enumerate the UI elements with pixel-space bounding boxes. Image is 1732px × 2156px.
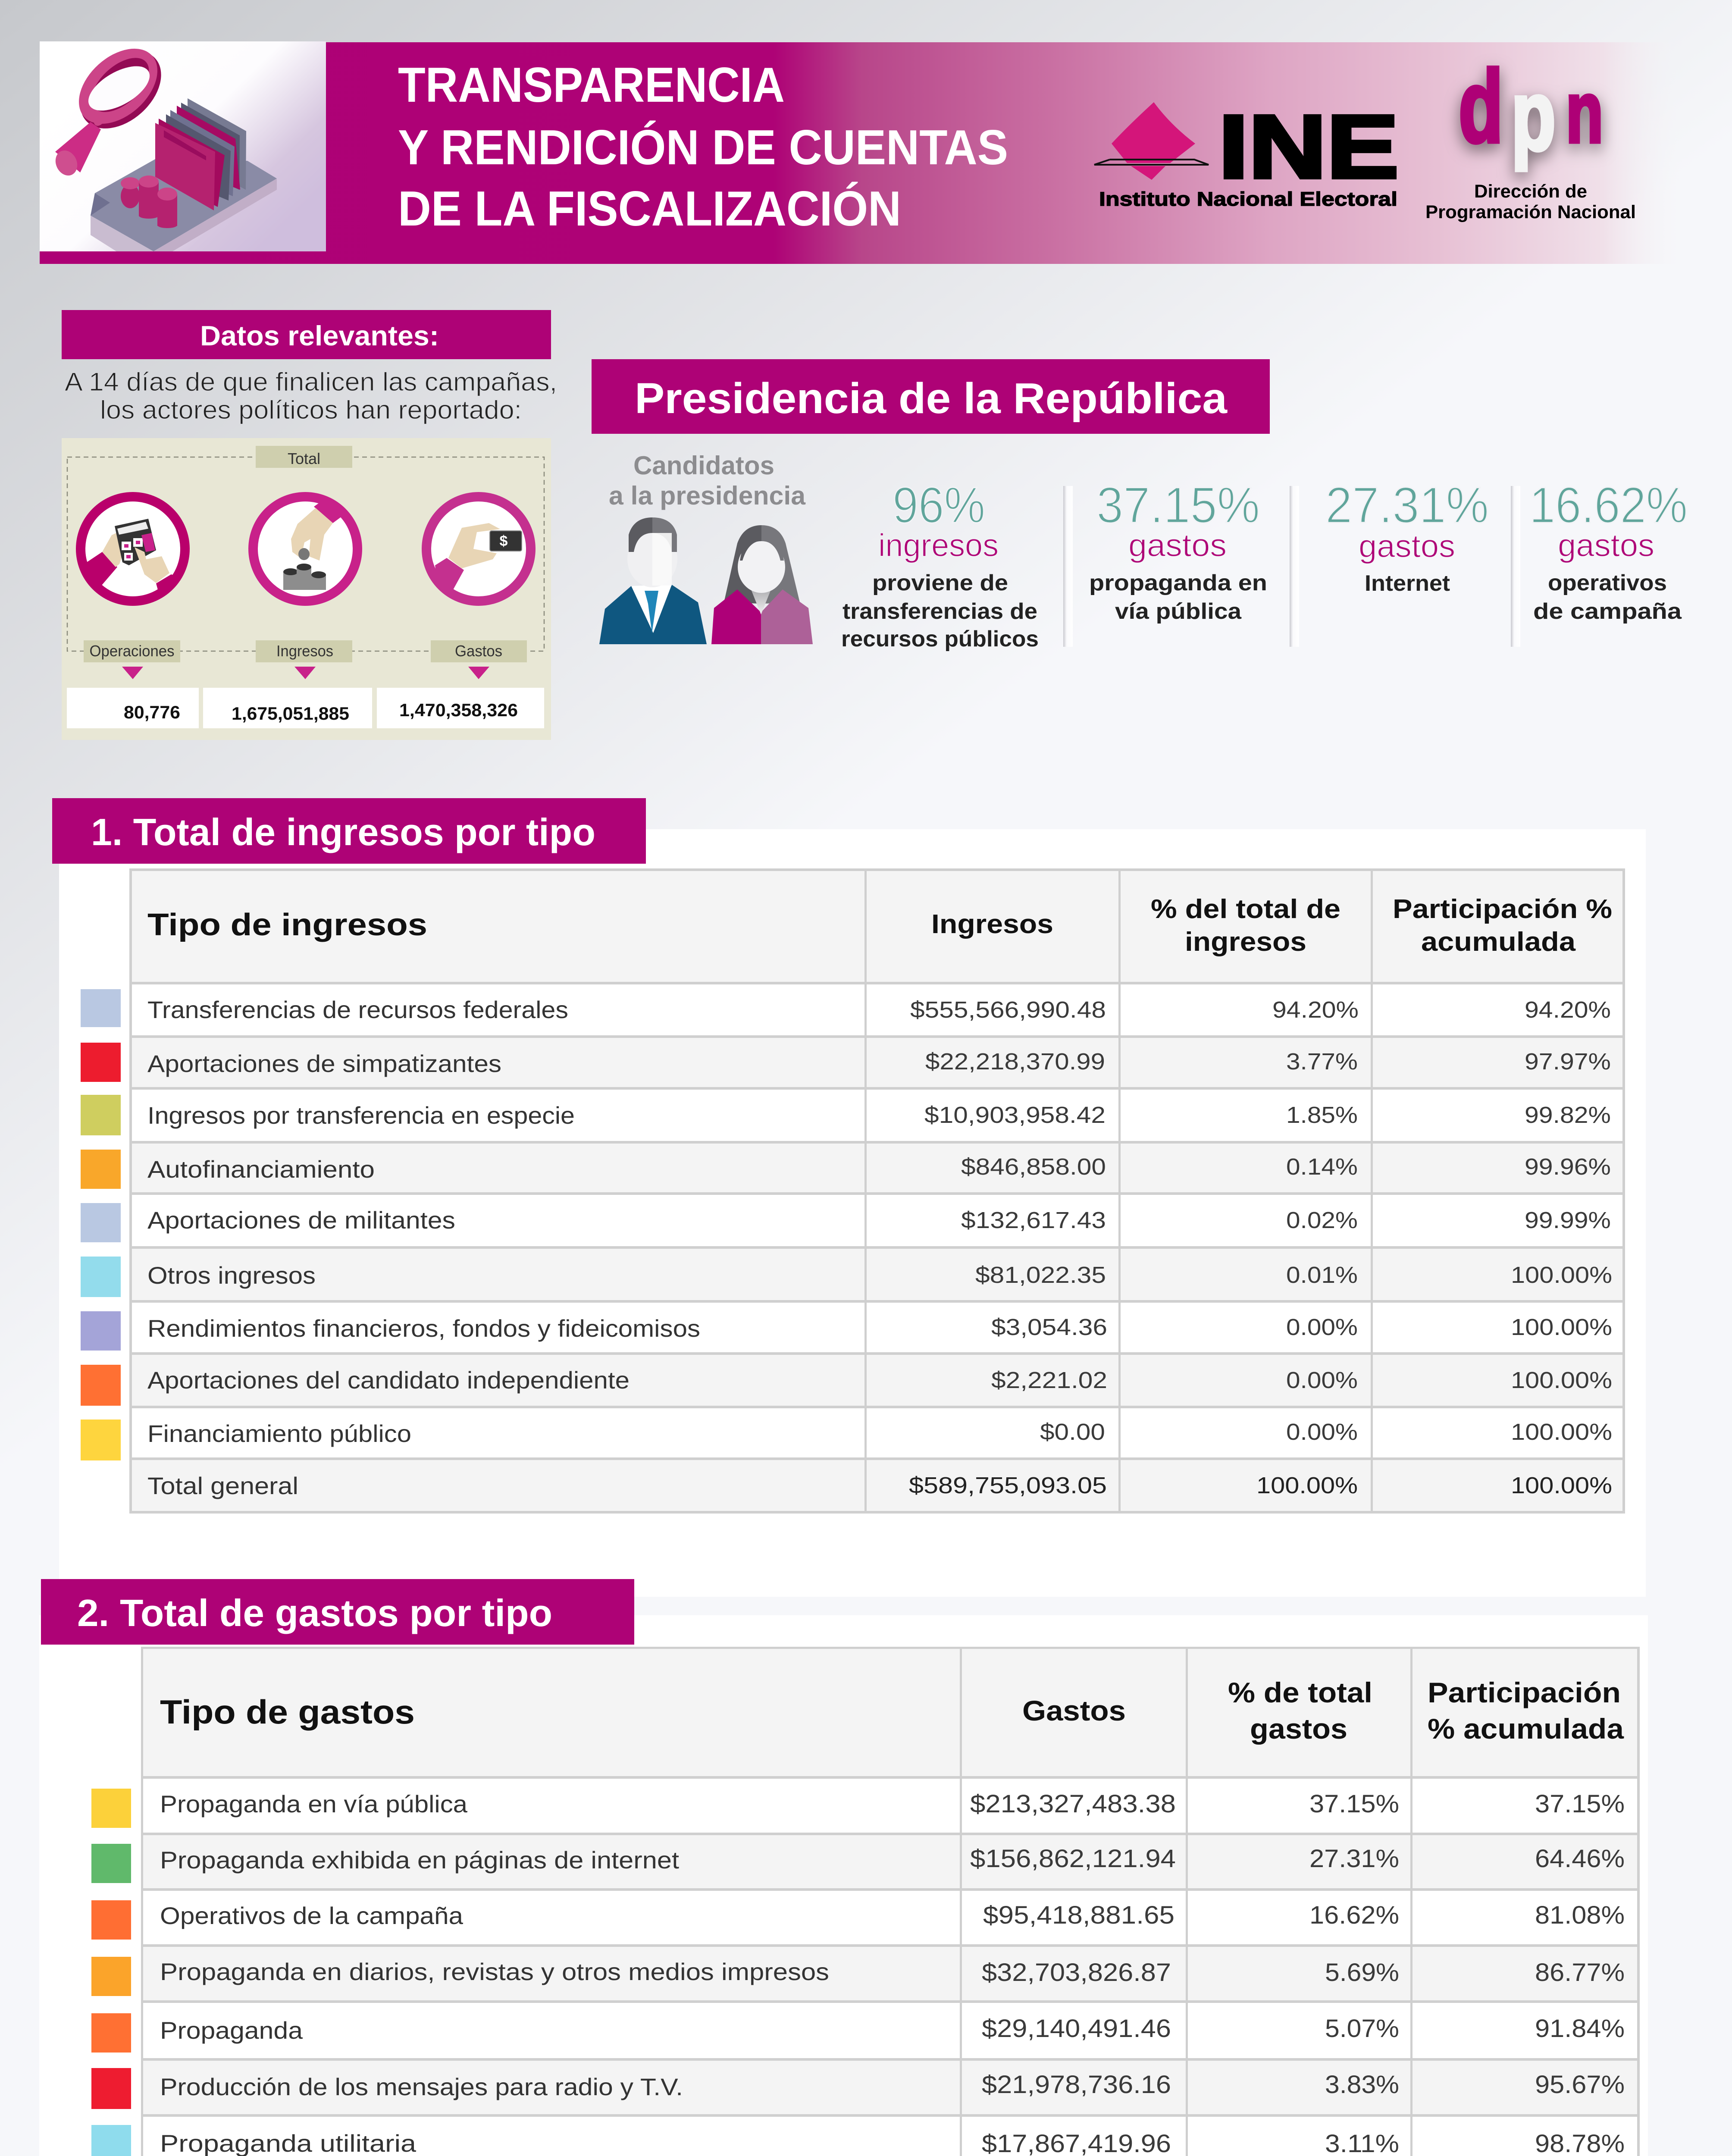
icon: calculator circle — [73, 495, 190, 604]
table rows: ingresos: 99.96% — [1525, 1154, 1611, 1180]
stat: 37.15% gastos: propaganda en — [1089, 570, 1267, 595]
icon: coins circle — [251, 494, 359, 603]
table rows: gastos: $21,978,736.16 — [982, 2071, 1171, 2099]
table rows: gastos: $156,862,121.94 — [970, 1845, 1176, 1873]
label: gastos — [431, 640, 527, 662]
table rows: gastos — [160, 1790, 1626, 2156]
table rows: ingresos: 0.14% — [1286, 1154, 1358, 1180]
table rows: gastos: 91.84% — [1535, 2015, 1625, 2043]
table rows: ingresos: Ingresos por transferencia en especie — [147, 1102, 575, 1129]
INE logo — [1094, 97, 1399, 210]
icon: banknote circle: $ — [500, 533, 508, 549]
table header: gastos: gastos — [1250, 1713, 1347, 1745]
table rows: gastos: Operativos de la campaña — [160, 1902, 464, 1929]
table header: gastos: % de total — [1228, 1677, 1372, 1708]
text block: candidatos: a la presidencia — [609, 481, 806, 510]
INE logo: Instituto Nacional Electoral — [1099, 188, 1397, 210]
table header: ingresos: acumulada — [1421, 927, 1576, 957]
table header: ingresos: ingresos — [1185, 927, 1306, 957]
table rows: ingresos: $81,022.35 — [975, 1262, 1106, 1288]
table rows: ingresos: Transferencias de recursos federales — [147, 996, 568, 1023]
stat: 16.62% gastos: gastos — [1558, 527, 1654, 563]
value: ingresos: 1,675,051,885 — [232, 703, 349, 724]
DPN logo — [1425, 50, 1636, 222]
table rows: gastos: 27.31% — [1309, 1845, 1399, 1873]
stat: 96% ingresos: proviene de — [872, 570, 1008, 595]
table rows: ingresos: 0.00% — [1286, 1419, 1358, 1445]
table rows: gastos: 37.15% — [1535, 1790, 1625, 1818]
table rows: ingresos: Aportaciones de simpatizantes — [147, 1050, 501, 1077]
table header: gastos: % acumulada — [1428, 1713, 1624, 1745]
heading: datos relevantes — [62, 310, 551, 359]
heading: presidencia de la república — [592, 359, 1270, 434]
stat: 37.15% gastos: gastos — [1128, 527, 1227, 563]
stat: 16.62% gastos: 16.62% — [1529, 477, 1688, 534]
header banner — [40, 34, 1682, 264]
table rows: gastos: $32,703,826.87 — [982, 1959, 1171, 1987]
DPN logo: Dirección de — [1474, 181, 1587, 202]
table rows: ingresos: $589,755,093.05 — [909, 1473, 1107, 1498]
panel: datos relevantes — [62, 310, 557, 740]
stat: 96% ingresos: transferencias de — [843, 599, 1037, 624]
stat: 96% ingresos — [841, 477, 1039, 652]
table rows: gastos: 3.83% — [1325, 2071, 1399, 2099]
table rows: ingresos: 0.00% — [1286, 1314, 1358, 1340]
table rows: ingresos: Aportaciones de militantes — [147, 1206, 455, 1234]
panel: candidatos — [599, 451, 813, 644]
table rows: ingresos: 0.01% — [1286, 1262, 1358, 1288]
stat: 16.62% gastos: de campaña — [1533, 599, 1682, 624]
table rows: ingresos: $846,858.00 — [961, 1154, 1106, 1180]
divider strips — [1063, 486, 1520, 647]
table rows: gastos: 5.69% — [1325, 1959, 1399, 1987]
stat: 16.62% gastos: operativos — [1548, 570, 1667, 595]
stat: 37.15% gastos — [1089, 477, 1267, 624]
heading: ingresos — [52, 798, 646, 864]
table rows: gastos: Propaganda en vía pública — [160, 1790, 468, 1818]
legend swatches: ingresos — [81, 989, 121, 1460]
INE logo: INE — [1218, 97, 1399, 197]
heading: ingresos: 1. Total de ingresos por tipo — [91, 811, 595, 853]
table rows: ingresos: Aportaciones del candidato independiente — [147, 1366, 630, 1394]
table rows: gastos: Propaganda en diarios, revistas y otros medios impresos — [160, 1958, 829, 1985]
value: gastos: 1,470,358,326 — [399, 700, 518, 720]
legend swatches: gastos — [91, 1789, 131, 2156]
table rows: gastos: 37.15% — [1309, 1790, 1399, 1818]
table header: ingresos — [147, 894, 1612, 957]
text block: candidatos — [609, 451, 806, 510]
table header: gastos: Gastos — [1022, 1695, 1126, 1727]
table rows: ingresos: Rendimientos financieros, fondos y fideicomisos — [147, 1315, 700, 1342]
table rows: ingresos: $2,221.02 — [991, 1367, 1107, 1393]
value: operaciones — [67, 688, 199, 728]
table rows: ingresos: 94.20% — [1272, 997, 1359, 1023]
table: gastos — [141, 1647, 1640, 2156]
panel: total de gastos — [39, 1579, 1648, 2156]
icon: banknote circle — [425, 495, 532, 603]
table rows: gastos: $95,418,881.65 — [983, 1901, 1175, 1929]
stat: 27.31% gastos: gastos — [1359, 528, 1455, 564]
table header: ingresos: % del total de — [1151, 894, 1340, 924]
table rows: ingresos: 100.00% — [1511, 1262, 1612, 1288]
table header: ingresos: Participación % — [1393, 894, 1612, 924]
table rows: ingresos: 99.99% — [1525, 1207, 1611, 1233]
stat: 96% ingresos: recursos públicos — [841, 627, 1039, 652]
table rows: ingresos: 99.82% — [1525, 1102, 1611, 1128]
table rows: ingresos: $3,054.36 — [991, 1314, 1107, 1340]
table rows: ingresos: Autofinanciamiento — [147, 1156, 375, 1183]
arrow: operaciones — [122, 667, 143, 679]
icon: man candidate — [599, 517, 707, 644]
table rows: ingresos: 0.00% — [1286, 1367, 1358, 1393]
title — [398, 58, 1008, 236]
table rows: gastos: 86.77% — [1535, 1959, 1625, 1987]
title: DE LA FISCALIZACIÓN — [398, 182, 901, 236]
table rows: ingresos: 100.00% — [1511, 1419, 1612, 1445]
table rows: gastos: 5.07% — [1325, 2015, 1399, 2043]
table rows: gastos: $29,140,491.46 — [982, 2015, 1171, 2043]
table header: ingresos: Tipo de ingresos — [147, 908, 427, 942]
table rows: ingresos: $132,617.43 — [961, 1207, 1106, 1233]
stat: 16.62% gastos — [1529, 477, 1688, 624]
table rows: ingresos: 100.00% — [1511, 1314, 1612, 1340]
table: ingresos — [129, 868, 1625, 1514]
stat: 96% ingresos: 96% — [893, 477, 985, 534]
arrow: ingresos — [294, 667, 316, 679]
label: total: Total — [288, 450, 320, 467]
table header: ingresos: Ingresos — [931, 909, 1053, 939]
DPN logo: d — [1459, 50, 1503, 164]
table rows: gastos: Propaganda exhibida en páginas de internet — [160, 1846, 679, 1874]
label: operaciones: Operaciones — [90, 642, 174, 660]
diagram: totals — [62, 438, 551, 740]
table rows: ingresos: $0.00 — [1040, 1419, 1105, 1445]
table header: gastos — [160, 1677, 1624, 1745]
label: ingresos — [256, 640, 352, 662]
stat: 96% ingresos: ingresos — [878, 527, 999, 563]
value: operaciones: 80,776 — [124, 702, 180, 722]
text block: intro — [65, 367, 557, 424]
value: gastos — [377, 688, 544, 728]
table rows: ingresos: 100.00% — [1511, 1473, 1612, 1498]
text block: intro: A 14 días de que finalicen las campañas, — [65, 367, 557, 396]
table rows: ingresos: $22,218,370.99 — [925, 1049, 1105, 1075]
arrow: gastos — [468, 667, 489, 679]
heading: gastos — [41, 1579, 634, 1645]
table rows: ingresos: 3.77% — [1286, 1049, 1358, 1075]
heading: gastos: 2. Total de gastos por tipo — [77, 1592, 552, 1634]
table rows: ingresos: $10,903,958.42 — [924, 1102, 1106, 1128]
heading: presidencia de la república: Presidencia de la República — [635, 374, 1228, 423]
heading: datos relevantes: Datos relevantes: — [200, 320, 439, 351]
title: Y RENDICIÓN DE CUENTAS — [398, 120, 1008, 175]
stat: 27.31% gastos: Internet — [1365, 571, 1450, 596]
stat: 37.15% gastos: 37.15% — [1096, 477, 1260, 534]
table rows: gastos: 16.62% — [1309, 1901, 1399, 1929]
label: total — [256, 446, 352, 468]
table header: gastos: Tipo de gastos — [160, 1693, 415, 1731]
stat: 37.15% gastos: vía pública — [1115, 599, 1242, 624]
table rows: gastos: 64.46% — [1535, 1845, 1625, 1873]
label: gastos: Gastos — [455, 642, 502, 660]
table rows: ingresos: 100.00% — [1256, 1473, 1358, 1498]
text block: intro: los actores políticos han reportado: — [100, 395, 522, 424]
table rows: ingresos: 0.02% — [1286, 1207, 1358, 1233]
panel: total de ingresos — [52, 798, 1646, 1597]
value: ingresos — [203, 688, 372, 728]
DPN logo: n — [1566, 64, 1603, 160]
text block: candidatos: Candidatos — [633, 451, 774, 480]
icon: magnifier, folders and coins — [40, 34, 326, 251]
table header: gastos: Participación — [1428, 1677, 1621, 1708]
table rows: ingresos: 97.97% — [1525, 1049, 1611, 1075]
table rows: gastos: Propaganda — [160, 2017, 303, 2044]
table rows: ingresos: Financiamiento público — [147, 1420, 411, 1447]
DPN logo: p — [1511, 60, 1556, 171]
table rows: gastos: Producción de los mensajes para radio y T.V. — [160, 2073, 683, 2100]
table rows: gastos: $213,327,483.38 — [970, 1790, 1176, 1818]
table rows: gastos: 81.08% — [1535, 1901, 1625, 1929]
label: ingresos: Ingresos — [276, 642, 333, 660]
title: TRANSPARENCIA — [398, 58, 785, 113]
icon: woman candidate — [711, 525, 813, 644]
stat: 27.31% gastos — [1325, 477, 1489, 596]
stat: 27.31% gastos: 27.31% — [1325, 477, 1489, 534]
table rows: ingresos: $555,566,990.48 — [910, 997, 1106, 1023]
table rows: ingresos: Total general — [147, 1472, 298, 1499]
table rows: ingresos: 100.00% — [1511, 1367, 1612, 1393]
table rows: ingresos: 94.20% — [1525, 997, 1611, 1023]
DPN logo: Programación Nacional — [1425, 202, 1636, 222]
table rows: ingresos — [147, 996, 1612, 1499]
table rows: gastos: 95.67% — [1535, 2071, 1625, 2099]
table rows: ingresos: Otros ingresos — [147, 1262, 316, 1289]
table rows: ingresos: 1.85% — [1286, 1102, 1358, 1128]
